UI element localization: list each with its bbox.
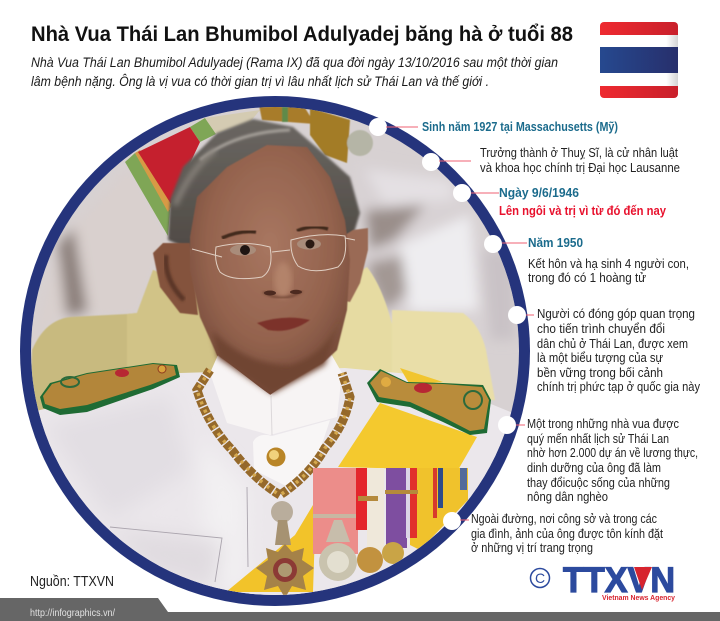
item: beloved king: Một trong những nhà vua được <box>527 417 679 431</box>
right background folds <box>355 160 515 340</box>
item: accession: Ngày 9/6/1946 <box>499 186 579 200</box>
pocket and placket seams <box>110 487 248 582</box>
item: education: Trưởng thành ở Thuỵ Sĩ, là cử nhân luật <box>480 146 678 160</box>
item: beloved king: quý mến nhất lịch sử Thái Lan <box>527 432 669 446</box>
face <box>190 145 350 393</box>
epaulette right <box>367 369 491 435</box>
uniform <box>38 368 512 595</box>
logo: copyright and TTXVN: TTXVN <box>563 561 675 600</box>
item: accession <box>499 186 666 218</box>
medals <box>319 520 404 581</box>
item: democracy: cho tiến trình chuyển đổi <box>537 322 665 336</box>
intro text: lâm bệnh nặng. Ông là vị vua có thời gian trị vì lâu nhất lịch sử Thái Lan và thế giới . <box>31 74 489 89</box>
footer url: http://infographics.vn/ <box>30 608 115 619</box>
title: Nhà Vua Thái Lan Bhumibol Adulyadej băng hà ở tuổi 88 <box>31 23 573 46</box>
item: beloved king: dinh dưỡng của ông đã làm <box>527 461 661 475</box>
item: beloved king <box>527 417 698 504</box>
item: education <box>480 146 680 175</box>
item: portraits <box>471 512 663 555</box>
item: democracy: bền vững trong bối cảnh <box>537 366 663 380</box>
item: beloved king: thay đổicuộc sống của những <box>527 476 670 490</box>
item: beloved king: nông dân nghèo <box>527 490 608 504</box>
brows and eyes <box>222 227 328 256</box>
medal ribbons <box>313 468 468 554</box>
item: democracy: là một biểu tượng của sự <box>537 351 663 365</box>
timeline dots <box>369 118 526 530</box>
connector lines <box>386 127 534 520</box>
item: democracy <box>537 307 701 394</box>
cream chairs <box>30 267 495 420</box>
collar <box>210 352 342 435</box>
epaulette left <box>40 363 180 415</box>
ears <box>153 228 368 315</box>
item: democracy: Người có đóng góp quan trọng <box>537 307 695 321</box>
red sash <box>125 110 260 236</box>
portrait circle <box>10 96 530 620</box>
item: education: và khoa học chính trị Đại học Lausanne <box>480 161 680 175</box>
item: democracy: dân chủ ở Thái Lan, được xem <box>537 337 688 351</box>
item: marriage: trong đó có 1 hoàng tử <box>528 271 646 285</box>
button <box>266 448 286 466</box>
item: marriage <box>528 236 689 285</box>
nose and mouth <box>257 262 310 331</box>
footer bar <box>0 598 720 621</box>
item: democracy: chính trị phức tạp ở quốc gia này <box>537 380 701 394</box>
logo: copyright and TTXVN: C <box>535 570 545 586</box>
neck <box>216 350 280 395</box>
source: Nguồn: TTXVN <box>30 574 114 590</box>
intro text <box>31 55 558 89</box>
yellow sash <box>226 368 477 592</box>
top decorations <box>258 107 374 164</box>
item: portraits: ở những vị trí trang trọng <box>471 541 593 555</box>
item: marriage: Năm 1950 <box>528 236 583 250</box>
pendant <box>256 501 314 598</box>
left background folds <box>31 226 96 345</box>
glasses <box>192 235 355 279</box>
item: marriage: Kết hôn và hạ sinh 4 người con, <box>528 257 689 271</box>
item: birth: Sinh năm 1927 tại Massachusetts (Mỹ) <box>422 120 618 134</box>
logo: copyright and TTXVN: Vietnam News Agency <box>602 595 675 602</box>
item: accession: Lên ngôi và trị vì từ đó đến nay <box>499 204 666 218</box>
necklace <box>197 370 350 495</box>
item: portraits: Ngoài đường, nơi công sở và trong các <box>471 512 657 526</box>
hair <box>168 119 360 250</box>
icon: Thai flag <box>600 22 678 98</box>
item: portraits: gia đình, ảnh của ông được tôn kính đặt <box>471 527 663 541</box>
intro text: Nhà Vua Thái Lan Bhumibol Adulyadej (Rama IX) đã qua đời ngày 13/10/2016 sau một thời gian <box>31 55 558 70</box>
